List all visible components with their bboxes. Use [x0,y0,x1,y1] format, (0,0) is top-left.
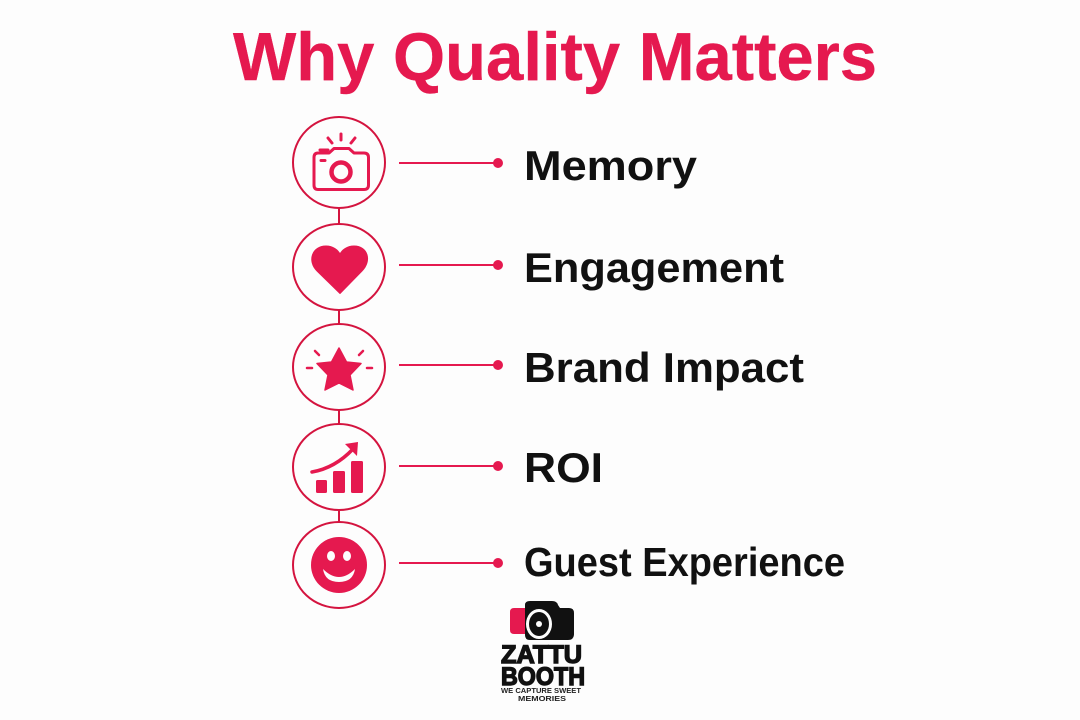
logo tagline line 2: MEMORIES [518,694,566,703]
item: ROI [293,424,603,510]
icon circle: star [293,324,385,410]
icon circle: heart [293,224,385,310]
connector [399,264,498,266]
icon: camera [314,134,368,190]
icon: star with sparkles [307,348,372,390]
icon: growth chart [312,442,363,493]
label: ROI [524,444,603,491]
connector [399,465,498,467]
label: Engagement [524,244,784,291]
item: Brand Impact [293,324,804,410]
logo: Zattu Booth [501,601,585,703]
dot [493,260,503,270]
connector [399,562,498,564]
logo camera icon [510,601,574,640]
item: Guest Experience [293,522,845,608]
dot [493,158,503,168]
title: Why Quality Matters [233,19,877,95]
item: Engagement [293,224,784,310]
icon circle: camera [293,117,385,208]
icon: heart [312,246,368,294]
label: Memory [524,142,698,189]
vertical connectors between circles [338,208,340,522]
connector [399,162,498,164]
item: Memory [293,117,698,208]
label: Guest Experience [524,539,845,585]
logo tagline line 1: WE CAPTURE SWEET [501,686,581,695]
icon circle: growth chart [293,424,385,510]
icon: smiley face [311,537,367,593]
dot [493,461,503,471]
logo wordmark line 2: BOOTH [501,663,585,691]
icon circle: smiley [293,522,385,608]
connector [399,364,498,366]
dot [493,558,503,568]
logo wordmark line 1: ZATTU [501,641,582,669]
dot [493,360,503,370]
label: Brand Impact [524,344,804,391]
